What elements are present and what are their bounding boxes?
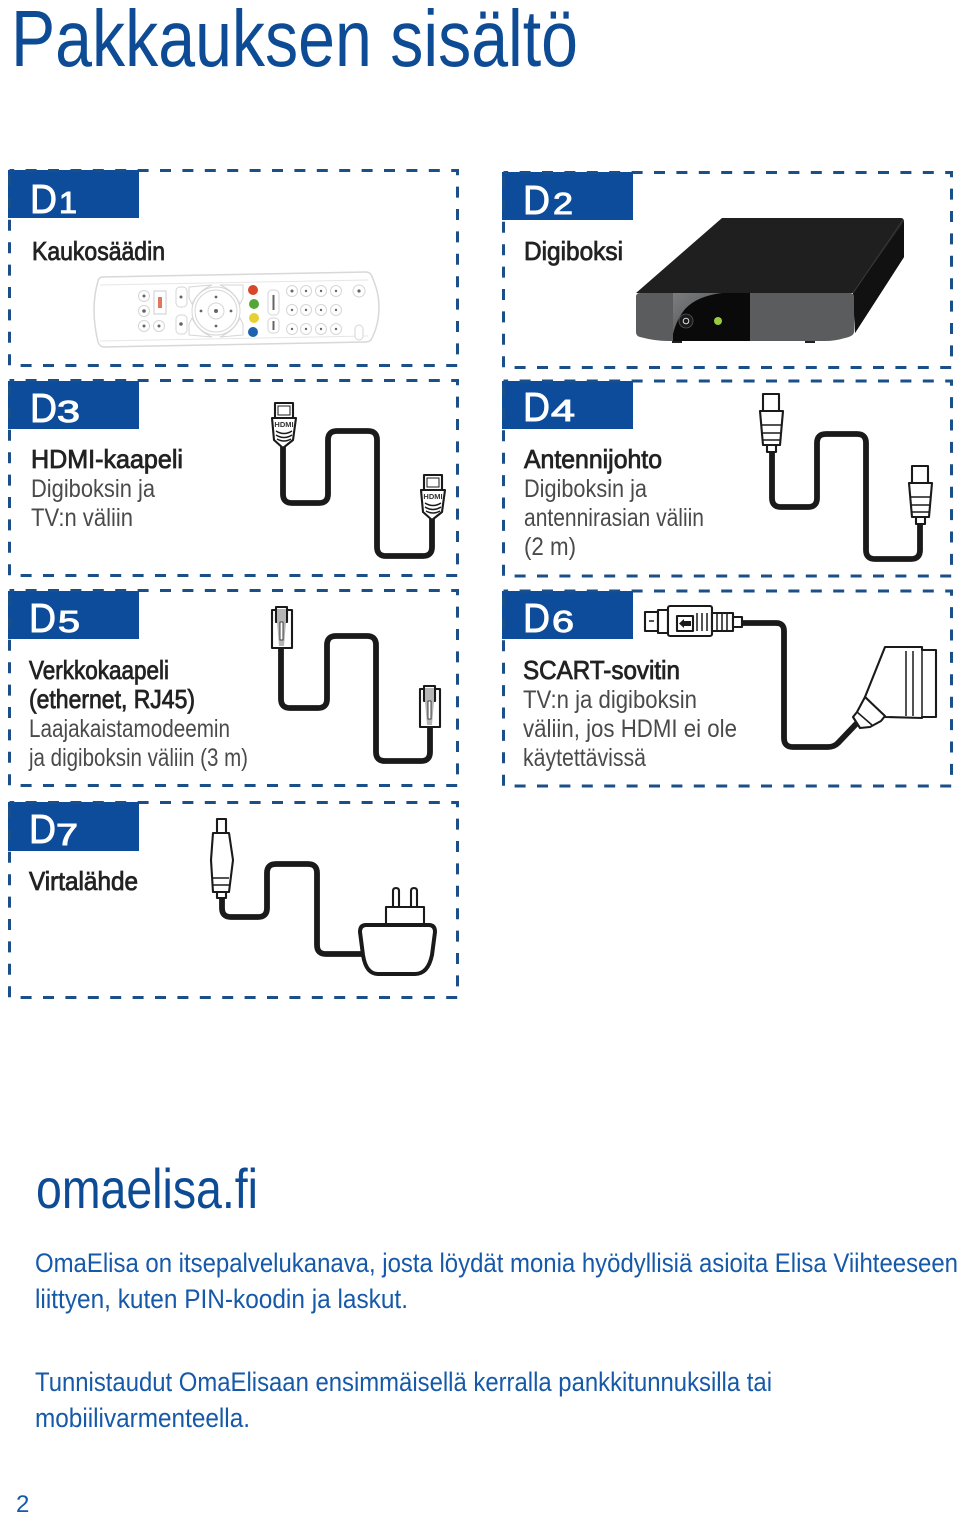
text block: authentication note: Tunnistaudut OmaElisaan ensimmäisellä kerralla pankkitunnuksilla tai (35, 1367, 772, 1397)
D3 text block: Digiboksin ja (31, 475, 155, 503)
panel: D2 set-top box (502, 172, 952, 368)
heading: omaelisa.fi: omaelisa.fi (36, 1157, 258, 1220)
icon: power supply (211, 819, 435, 974)
panel: D3 HDMI cable (8, 380, 458, 576)
text block: authentication note (35, 1367, 772, 1433)
panel: D6 SCART adapter (502, 591, 952, 786)
D3 text block (31, 444, 183, 532)
D3 badge: 3 (57, 394, 80, 429)
text block: OmaElisa description: liittyen, kuten PIN-koodin ja laskut. (35, 1284, 408, 1314)
icon: network cable (272, 607, 440, 761)
D5 badge: 5 (58, 604, 80, 639)
icon: HDMI cable: HDMI (274, 420, 294, 429)
D3 badge: D (30, 385, 57, 431)
page number: 2 (16, 1491, 29, 1518)
icon: HDMI cable: HDMI (423, 492, 443, 501)
panel: D1 remote control (8, 170, 458, 366)
D6 text block: TV:n ja digiboksin (523, 686, 697, 714)
D4 badge: D (523, 384, 550, 430)
icon: antenna cable (760, 394, 932, 559)
D2 badge (502, 172, 633, 223)
D4 text block: antennirasian väliin (524, 504, 704, 532)
D7 heading: Virtalähde (29, 866, 138, 896)
D6 text block: SCART-sovitin (523, 655, 680, 685)
D1 heading: Kaukosäädin (32, 236, 165, 266)
D2 heading: Digiboksi (524, 236, 623, 266)
D6 text block: käytettävissä (523, 744, 646, 772)
D4 text block: (2 m) (524, 533, 576, 561)
D6 text block (523, 655, 737, 772)
panel: D4 antenna cable (502, 381, 952, 576)
D2 badge: 2 (553, 186, 573, 221)
D7 badge: D (29, 806, 56, 852)
D5 text block (28, 655, 248, 772)
D4 badge (502, 381, 633, 430)
D3 badge (8, 381, 139, 431)
icon: remote control (94, 272, 379, 347)
D7 badge: 7 (56, 817, 78, 852)
D5 text block: (ethernet, RJ45) (29, 684, 195, 714)
D1 badge: 1 (59, 185, 77, 220)
D2 badge: D (523, 177, 550, 223)
icon: SCART adapter (645, 606, 936, 747)
D5 badge: D (29, 595, 56, 641)
D5 text block: ja digiboksin väliin (3 m) (28, 744, 248, 772)
D5 text block: Laajakaistamodeemin (29, 715, 230, 743)
text block: OmaElisa description (35, 1248, 958, 1314)
icon: set-top box (636, 218, 904, 343)
D6 badge: 6 (552, 604, 574, 639)
D6 text block: väliin, jos HDMI ei ole (523, 715, 737, 743)
panel: D5 network cable (8, 590, 458, 786)
D5 text block: Verkkokaapeli (29, 655, 169, 685)
D7 badge (8, 802, 139, 852)
panel: D7 power supply (8, 802, 458, 998)
D5 badge (8, 591, 139, 641)
D1 badge: D (30, 176, 57, 222)
icon: HDMI cable (272, 403, 445, 556)
D3 text block: TV:n väliin (31, 504, 133, 532)
D3 text block: HDMI-kaapeli (31, 444, 183, 474)
D4 text block: Antennijohto (524, 444, 662, 474)
D1 badge (8, 170, 139, 222)
text block: authentication note: mobiilivarmenteella. (35, 1403, 250, 1433)
D4 badge: 4 (551, 393, 575, 428)
D4 text block (524, 444, 704, 561)
D4 text block: Digiboksin ja (524, 475, 647, 503)
D6 badge (502, 591, 633, 641)
D6 badge: D (523, 595, 550, 641)
